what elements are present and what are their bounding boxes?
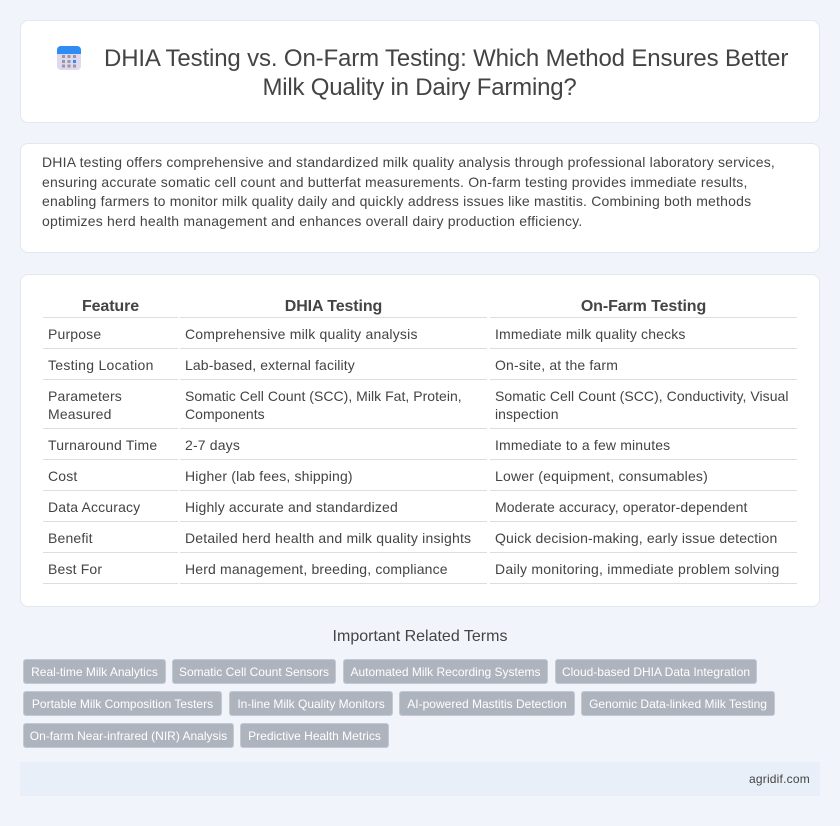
- tag: Predictive Health Metrics: Predictive Health Metrics: [248, 729, 381, 743]
- row: Parameters Measured: Components: [185, 406, 265, 422]
- tag: AI-powered Mastitis Detection: [399, 691, 575, 716]
- tag: In-line Milk Quality Monitors: [229, 691, 393, 716]
- tag: On-farm Near-infrared (NIR) Analysis: [23, 723, 234, 748]
- related terms tags: [23, 659, 775, 748]
- tag: Cloud-based DHIA Data Integration: [555, 659, 757, 684]
- row: Testing Location: Lab-based, external facility: [185, 357, 355, 373]
- icon: calendar: [57, 46, 81, 70]
- tag: Real-time Milk Analytics: [23, 659, 166, 684]
- tag: Somatic Cell Count Sensors: Somatic Cell Count Sensors: [179, 665, 329, 679]
- row: Turnaround Time: Turnaround Time: [48, 437, 157, 453]
- title line 1: DHIA Testing vs. On-Farm Testing: Which Method Ensures Better: [104, 45, 788, 72]
- row: Best For: [43, 561, 797, 584]
- tag: Portable Milk Composition Testers: [23, 691, 222, 716]
- row: Turnaround Time: [43, 437, 797, 460]
- row: Data Accuracy: Moderate accuracy, operator-dependent: [495, 499, 747, 515]
- table header row: [43, 298, 797, 318]
- row: Purpose: Purpose: [48, 326, 101, 342]
- tag: Real-time Milk Analytics: Real-time Milk Analytics: [31, 665, 158, 679]
- header card: [20, 20, 820, 123]
- description text: optimizes herd health management and enhances overall dairy production efficiency.: [42, 212, 582, 228]
- row: Parameters Measured: Somatic Cell Count (SCC), Conductivity, Visual: [495, 388, 789, 404]
- row: Best For: Daily monitoring, immediate problem solving: [495, 561, 780, 577]
- row: Data Accuracy: Highly accurate and standardized: [185, 499, 398, 515]
- row: Testing Location: [43, 357, 797, 380]
- row: Turnaround Time: 2-7 days: [185, 437, 240, 453]
- tag: Portable Milk Composition Testers: Portable Milk Composition Testers: [32, 697, 213, 711]
- row: Purpose: Immediate milk quality checks: [495, 326, 686, 342]
- row: Testing Location: Testing Location: [48, 357, 154, 373]
- row: Parameters Measured: inspection: [495, 406, 559, 422]
- row: Turnaround Time: Immediate to a few minutes: [495, 437, 670, 453]
- row: Purpose: [43, 326, 797, 349]
- footer: agridif.com: agridif.com: [749, 772, 810, 786]
- tag: Genomic Data-linked Milk Testing: Genomic Data-linked Milk Testing: [589, 697, 767, 711]
- tag: Automated Milk Recording Systems: [343, 659, 548, 684]
- tag: Automated Milk Recording Systems: Automated Milk Recording Systems: [350, 665, 541, 679]
- description card: [20, 143, 820, 253]
- tag: Somatic Cell Count Sensors: [172, 659, 336, 684]
- row: Benefit: Detailed herd health and milk quality insights: [185, 530, 471, 546]
- row: Data Accuracy: [43, 499, 797, 522]
- row: Best For: Herd management, breeding, compliance: [185, 561, 448, 577]
- row: Benefit: Quick decision-making, early issue detection: [495, 530, 777, 546]
- related terms heading: Important Related Terms: [333, 628, 507, 645]
- description text: enabling farmers to monitor milk quality daily and quickly address issues like mastitis. Combining both methods: [42, 193, 751, 209]
- description text: [42, 154, 775, 229]
- tag: In-line Milk Quality Monitors: In-line Milk Quality Monitors: [237, 697, 385, 711]
- row: Data Accuracy: Data Accuracy: [48, 499, 140, 515]
- row: Benefit: Benefit: [48, 530, 93, 546]
- row: Testing Location: On-site, at the farm: [495, 357, 618, 373]
- row: Parameters Measured: [43, 388, 797, 429]
- row: Cost: [43, 468, 797, 491]
- row: Cost: Higher (lab fees, shipping): [185, 468, 353, 484]
- tag: Genomic Data-linked Milk Testing: [581, 691, 775, 716]
- tag: On-farm Near-infrared (NIR) Analysis: On-farm Near-infrared (NIR) Analysis: [30, 729, 227, 743]
- table header row: Feature: [82, 298, 139, 315]
- row: Benefit: [43, 530, 797, 553]
- table header row: DHIA Testing: [285, 298, 382, 315]
- tag: AI-powered Mastitis Detection: AI-powered Mastitis Detection: [407, 697, 567, 711]
- row: Parameters Measured: Parameters: [48, 388, 122, 404]
- table header row: On-Farm Testing: [581, 298, 706, 315]
- title line 2: Milk Quality in Dairy Farming?: [262, 74, 577, 101]
- row: Best For: Best For: [48, 561, 102, 577]
- comparison table: [43, 298, 797, 584]
- row: Parameters Measured: Measured: [48, 406, 112, 422]
- description text: DHIA testing offers comprehensive and standardized milk quality analysis through professional laboratory services,: [42, 154, 775, 170]
- description text: ensuring accurate somatic cell count and butterfat measurements. On-farm testing provides immediate results,: [42, 174, 748, 190]
- tag: Cloud-based DHIA Data Integration: Cloud-based DHIA Data Integration: [562, 665, 750, 679]
- tag: Predictive Health Metrics: [240, 723, 389, 748]
- table card: [20, 274, 820, 607]
- row: Parameters Measured: Somatic Cell Count (SCC), Milk Fat, Protein,: [185, 388, 462, 404]
- footer bar: [20, 762, 820, 796]
- row: Cost: Cost: [48, 468, 77, 484]
- row: Purpose: Comprehensive milk quality analysis: [185, 326, 418, 342]
- row: Cost: Lower (equipment, consumables): [495, 468, 708, 484]
